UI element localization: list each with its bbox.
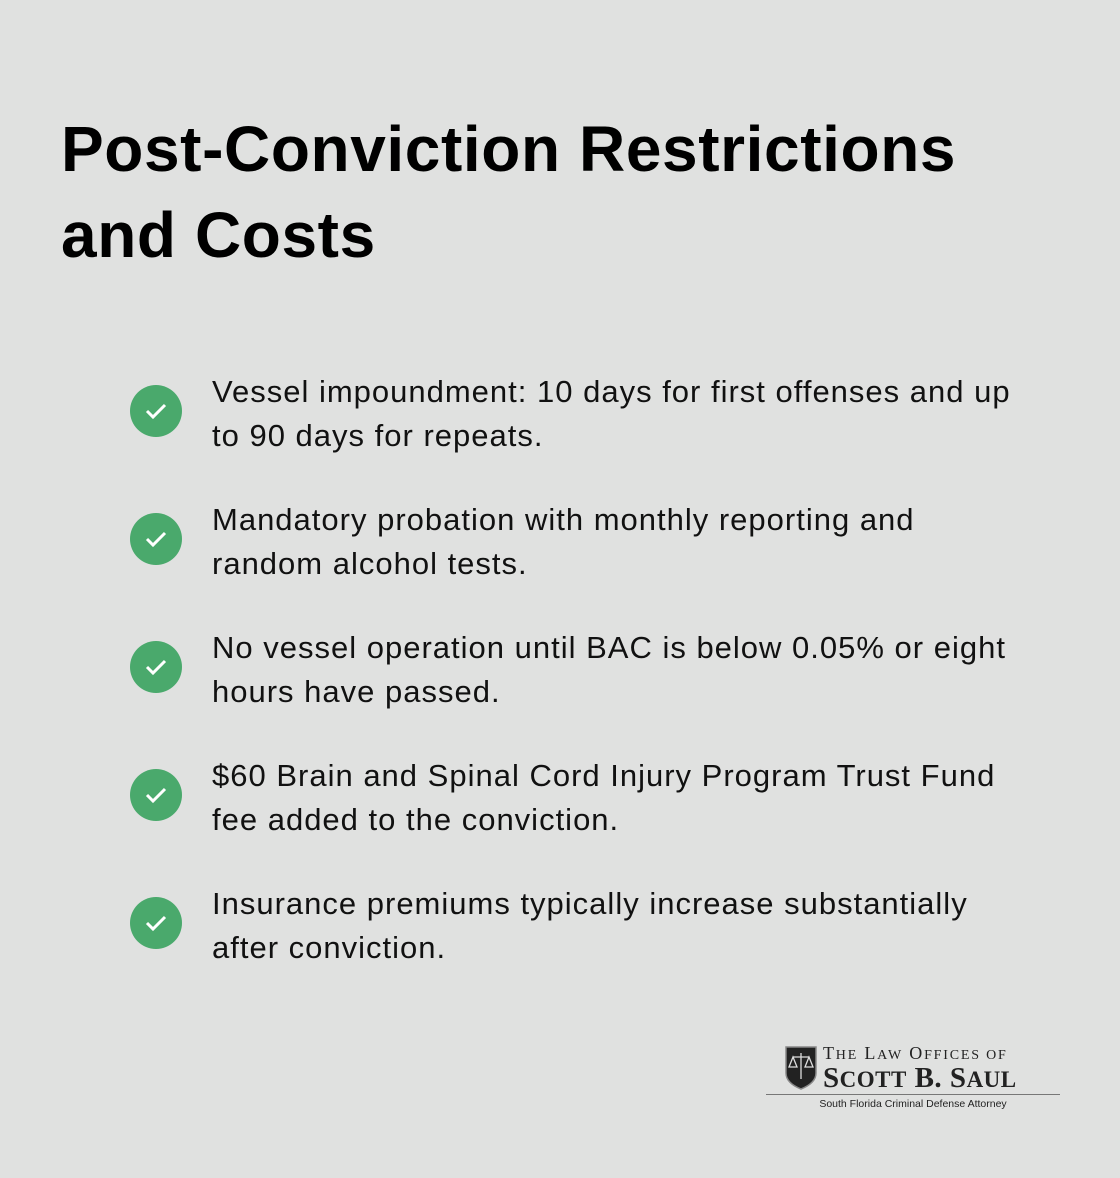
text 4 [212, 758, 995, 837]
title: and Costs [61, 199, 376, 271]
item 3 [130, 630, 1006, 709]
text 5: after conviction. [212, 930, 446, 965]
item 4 [130, 758, 995, 837]
text 1: Vessel impoundment: 10 days for first offenses and up [212, 374, 1011, 409]
text 2: random alcohol tests. [212, 546, 528, 581]
icon: check [130, 513, 182, 565]
title: Post-Conviction Restrictions [61, 113, 956, 185]
logo text: THE LAW OFFICES OF [823, 1043, 1008, 1063]
item 1 [130, 374, 1011, 453]
text 3 [212, 630, 1006, 709]
item 2 [130, 502, 915, 581]
icon: shield [785, 1046, 817, 1090]
text 2: Mandatory probation with monthly reporting and [212, 502, 915, 537]
text 3: hours have passed. [212, 674, 501, 709]
icon: check [130, 897, 182, 949]
title [61, 113, 956, 271]
text 3: No vessel operation until BAC is below 0.05% or eight [212, 630, 1006, 665]
text 1 [212, 374, 1011, 453]
text 4: $60 Brain and Spinal Cord Injury Program Trust Fund [212, 758, 995, 793]
icon: check [130, 641, 182, 693]
logo [766, 1043, 1060, 1110]
icon: check [130, 769, 182, 821]
logo text: SCOTT B. SAUL [823, 1062, 1017, 1094]
text 4: fee added to the conviction. [212, 802, 619, 837]
icon: check [130, 385, 182, 437]
text 2 [212, 502, 915, 581]
text 1: to 90 days for repeats. [212, 418, 543, 453]
tagline: South Florida Criminal Defense Attorney [819, 1098, 1007, 1110]
logo text [823, 1043, 1017, 1094]
item 5 [130, 886, 968, 965]
text 5 [212, 886, 968, 965]
text 5: Insurance premiums typically increase substantially [212, 886, 968, 921]
